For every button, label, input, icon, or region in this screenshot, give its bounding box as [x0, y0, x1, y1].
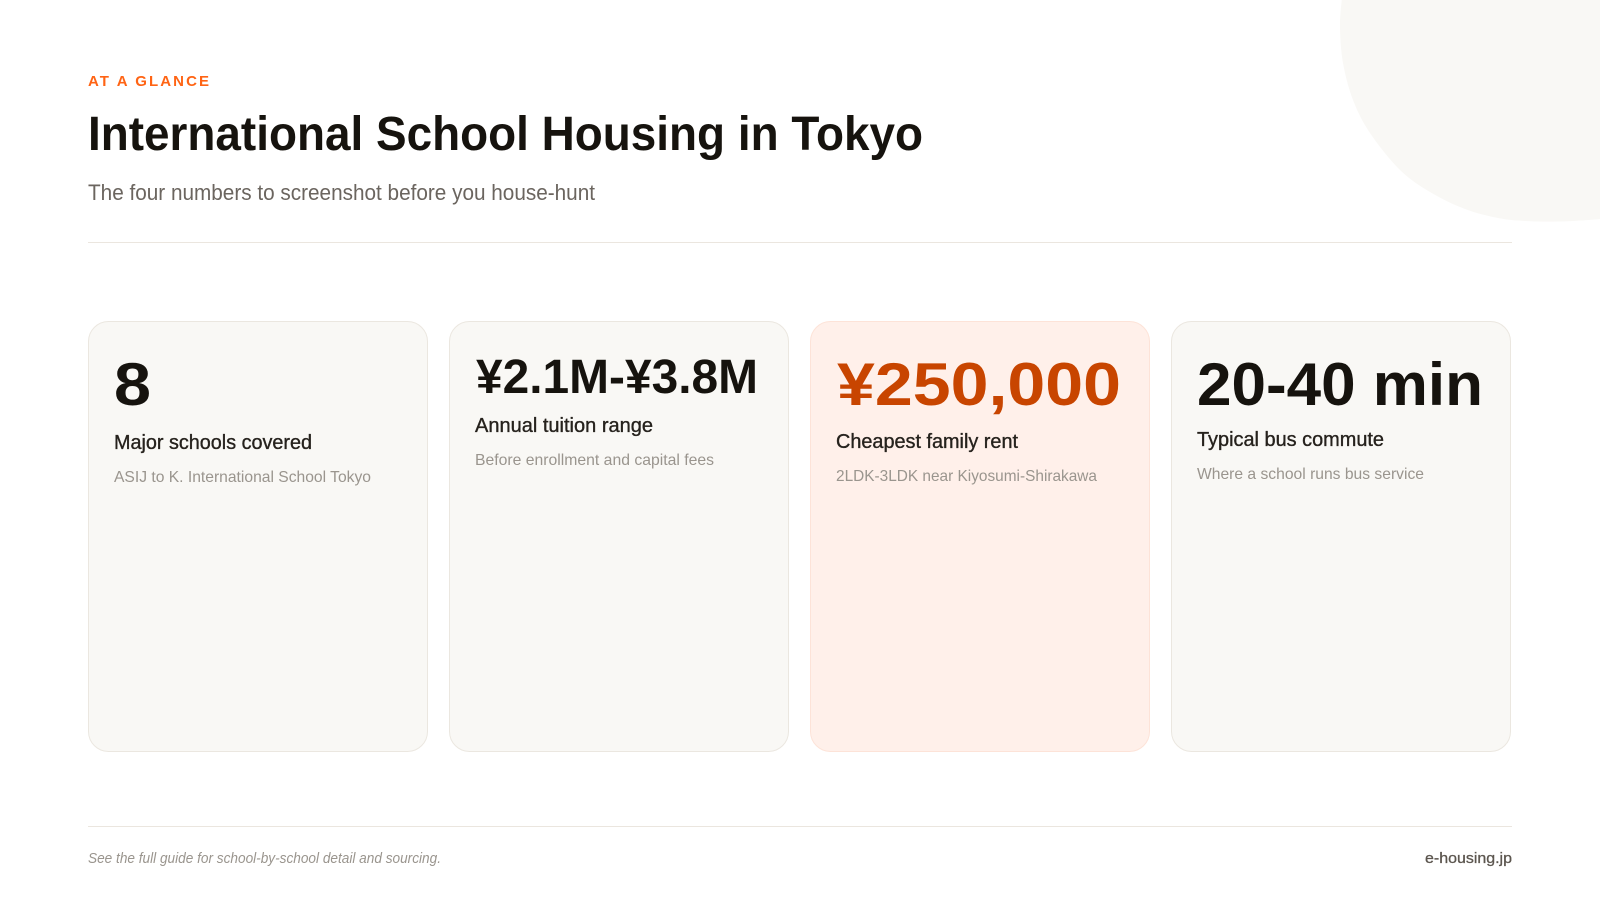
panel: bus commute — [1172, 322, 1510, 752]
decorative corner blob — [1340, 0, 1600, 222]
stat label: Annual tuition range — [475, 415, 653, 437]
stat number: 20-40 min — [1197, 351, 1483, 418]
subtitle: The four numbers to screenshot before you house-hunt — [88, 180, 595, 205]
panel: tuition — [450, 322, 788, 752]
stat number: ¥2.1M-¥3.8M — [476, 351, 758, 404]
title: International School Housing in Tokyo — [88, 108, 923, 161]
stat number: ¥250,000 — [837, 351, 1121, 418]
header — [88, 73, 923, 205]
stat label: Typical bus commute — [1197, 429, 1384, 451]
footnote: See the full guide for school-by-school detail and sourcing. — [88, 850, 441, 867]
stat note: 2LDK-3LDK near Kiyosumi-Shirakawa — [836, 468, 1097, 485]
stat number: 8 — [114, 351, 151, 418]
stat note: Before enrollment and capital fees — [475, 452, 714, 469]
stat note: Where a school runs bus service — [1197, 466, 1424, 483]
stat label: Major schools covered — [114, 432, 312, 454]
stat label: Cheapest family rent — [836, 431, 1018, 453]
footer — [88, 850, 1512, 867]
eyebrow: AT A GLANCE — [88, 73, 209, 90]
site name: e-housing.jp — [1425, 850, 1512, 867]
panel: major schools — [88, 322, 428, 752]
panel: family rent highlighted — [810, 322, 1150, 752]
stat note: ASIJ to K. International School Tokyo — [114, 469, 371, 486]
